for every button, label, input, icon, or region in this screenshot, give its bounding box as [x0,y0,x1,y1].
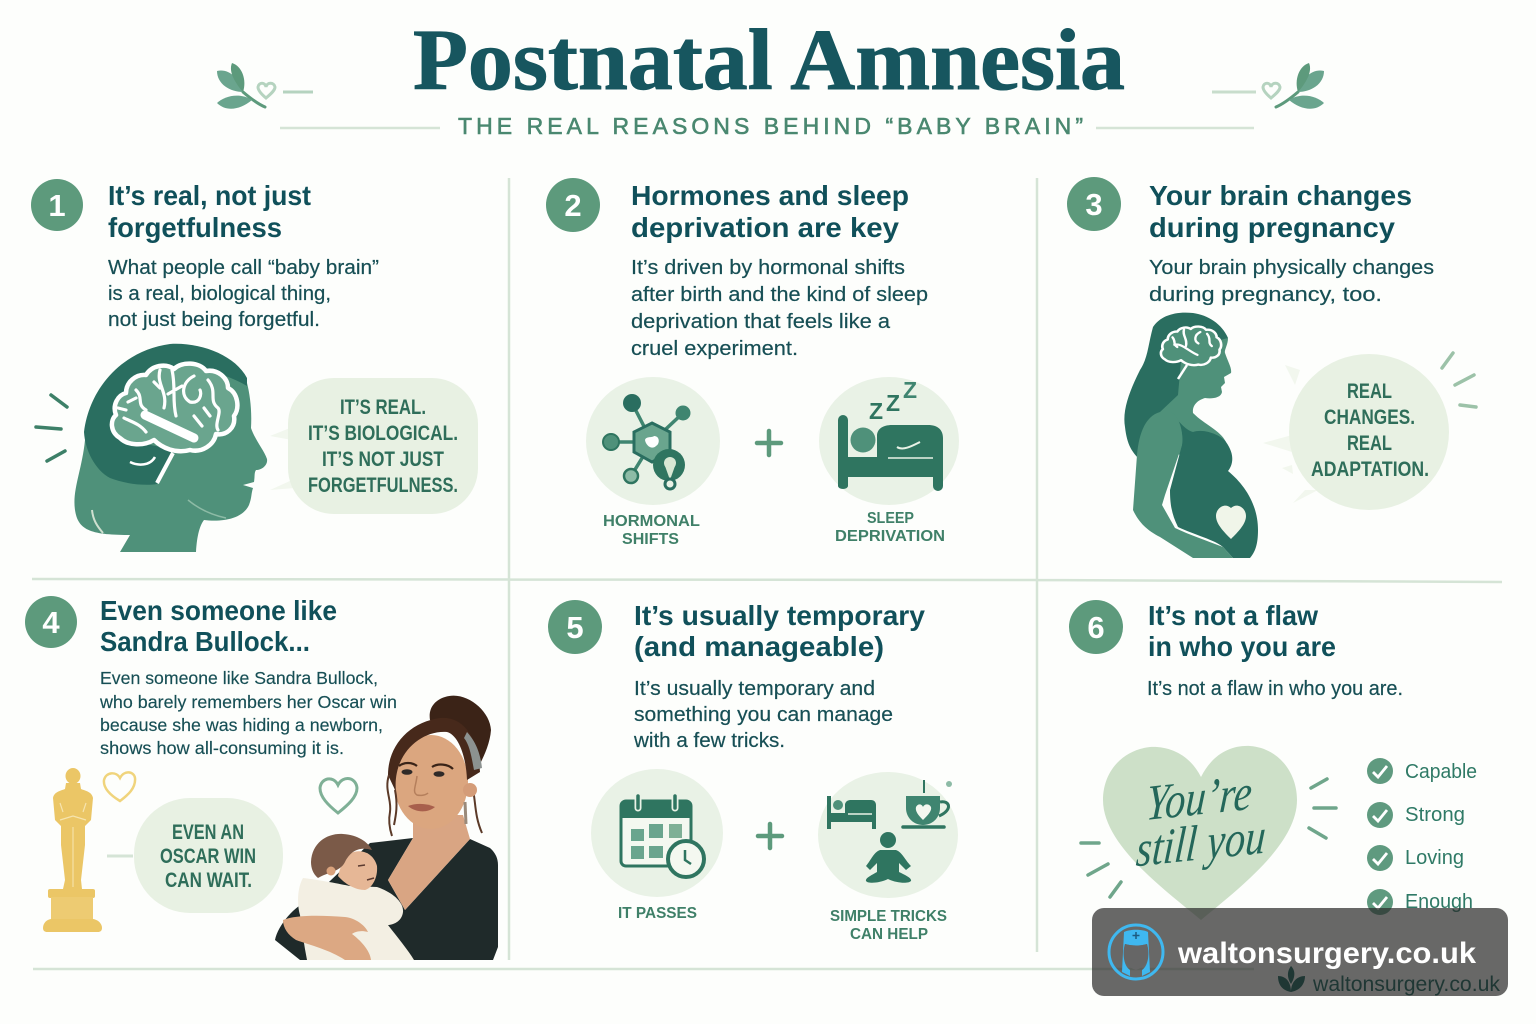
number badge 3 [1067,177,1121,231]
heading 6: in who you are [1148,631,1336,662]
body text 2: after birth and the kind of sleep [631,284,928,306]
speech bubble 4 [134,798,283,913]
heart with script message: You’re [1145,764,1254,831]
speech bubble 1: FORGETFULNESS. [308,474,458,497]
heading 3: during pregnancy [1149,212,1395,243]
icon: gold Oscar statuette [43,768,102,932]
speech bubble 3: CHANGES. [1324,406,1415,429]
panel: 1 real, not forgetfulness [31,179,478,552]
icon: pregnant woman silhouette with brain [1124,313,1258,558]
icon: simple tricks (bed, tea, meditation) [818,772,958,898]
number badge 5 [548,600,602,654]
heading 6: It’s not a flaw [1148,600,1318,631]
title: Postnatal Amnesia [413,11,1125,108]
number badge 2: 2 [564,188,582,223]
body text 2: It’s driven by hormonal shifts [631,257,905,279]
heading 1: It’s real, not just [108,180,311,211]
body text 6: It’s not a flaw in who you are. [1147,678,1403,700]
heading 2: deprivation are key [631,212,899,243]
number badge 4 [25,596,77,648]
body text 2: deprivation that feels like a [631,311,891,333]
panel: 3 brain changes [1067,177,1476,558]
number badge 1 [31,179,83,231]
connector line [107,854,133,858]
heading 2: Hormones and sleep [631,180,909,211]
speech bubble 1: IT’S NOT JUST [322,448,444,471]
heading 5 [634,600,925,662]
heading 1: forgetfulness [108,212,282,243]
label: simple tricks: CAN HELP [850,926,928,943]
original site mark [1278,966,1500,996]
body text 4: Even someone like Sandra Bullock, [100,668,378,688]
ticks around head [36,395,67,461]
body text 5: something you can manage [634,704,893,726]
watermark badge: waltonsurgery.co.uk [1177,937,1476,970]
icon: nurse logo [1109,925,1163,979]
body text 2 [631,257,928,360]
heading 2 [631,180,909,243]
speech bubble 1 [270,378,478,514]
speech bubble 3: ADAPTATION. [1311,458,1429,481]
number badge 6: 6 [1087,610,1105,645]
label: hormonal shifts: SHIFTS [622,531,679,548]
label: hormonal shifts: HORMONAL [603,513,700,530]
checklist: Enough [1405,891,1473,913]
icon: green heart outline [320,779,357,813]
illustration: mother holding baby [275,696,498,960]
icon: sleeping in bed: Z [903,377,917,403]
heart with script message: still you [1135,807,1268,877]
ticks around bubble [1442,353,1476,407]
label: hormonal shifts [603,513,700,548]
number badge 3: 3 [1085,187,1103,222]
icon: left leaf and heart ornament [217,63,313,109]
body text 5: with a few tricks. [633,730,785,752]
body text 1: is a real, biological thing, [108,283,331,305]
icon: sleeping in bed [819,377,959,505]
heading 3: Your brain changes [1149,180,1412,211]
label: sleep deprivation: SLEEP [867,510,914,527]
panel: 2 hormones and sleep [546,178,959,548]
number badge 1: 1 [48,188,66,223]
body text 2: cruel experiment. [631,338,798,360]
label: sleep deprivation: DEPRIVATION [835,528,945,545]
body text 1: What people call “baby brain” [108,257,379,279]
body text 4: shows how all-consuming it is. [100,738,344,758]
speech bubble 3: REAL [1347,432,1392,455]
heading 3 [1149,180,1412,243]
body text 4: who barely remembers her Oscar win [99,692,397,712]
speech bubble 4: EVEN AN [172,821,244,844]
speech bubble 3: REAL [1347,380,1392,403]
checklist: Strong [1405,804,1465,826]
label: simple tricks [830,908,947,943]
speech bubble 4: OSCAR WIN [160,845,256,868]
body text 5 [633,678,893,752]
heading 4 [100,595,337,657]
speech bubble 1: IT’S BIOLOGICAL. [308,422,458,445]
panel: 5 temporary and manageable [548,600,958,943]
body text 3 [1149,257,1434,306]
original site mark: waltonsurgery.co.uk [1312,973,1500,996]
subtitle: THE REAL REASONS BEHIND “BABY BRAIN” [458,113,1083,139]
icon: gold heart outline [104,772,135,801]
number badge 2 [546,178,600,232]
heading 5: It’s usually temporary [634,600,925,631]
icon: calendar and clock [591,769,723,897]
plus sign [758,824,782,848]
heading 4: Even someone like [100,595,337,626]
body text 4: because she was hiding a newborn, [100,715,383,735]
icon: head silhouette with brain [74,344,267,552]
body text 3: Your brain physically changes [1149,257,1434,279]
panel: 4 Sandra Bullock [25,595,498,960]
body text 5: It’s usually temporary and [634,678,875,700]
watermark badge [1092,908,1508,996]
heart with script message [1103,746,1297,920]
number badge 4: 4 [42,605,60,640]
speech bubble 1: IT’S REAL. [340,396,426,419]
icon: right leaf and heart ornament [1212,63,1324,109]
icon: sleeping in bed: Z [886,390,900,416]
number badge 5: 5 [566,610,584,645]
heading 6 [1148,600,1336,662]
body text 4 [99,668,397,758]
label: it passes: IT PASSES [618,905,697,922]
body text 1: not just being forgetful. [108,309,320,331]
checklist [1367,758,1477,915]
ticks around heart [1081,779,1336,897]
number badge 6 [1069,600,1123,654]
speech bubble 4: CAN WAIT. [165,869,252,892]
heading 4: Sandra Bullock... [100,626,310,657]
icon: sleeping in bed: Z [869,398,883,424]
heading 1 [108,180,311,243]
plus sign [757,431,781,455]
body text 1 [108,257,379,331]
icon: hormone molecule [586,377,720,505]
checklist: Capable [1405,761,1477,783]
checklist: Loving [1405,847,1464,869]
speech bubble 3 [1263,354,1449,510]
label: simple tricks: SIMPLE TRICKS [830,908,947,925]
label: sleep deprivation [835,510,945,545]
heading 5: (and manageable) [634,631,884,662]
panel: 6 not a flaw [1069,600,1477,920]
body text 3: during pregnancy, too. [1149,284,1382,306]
